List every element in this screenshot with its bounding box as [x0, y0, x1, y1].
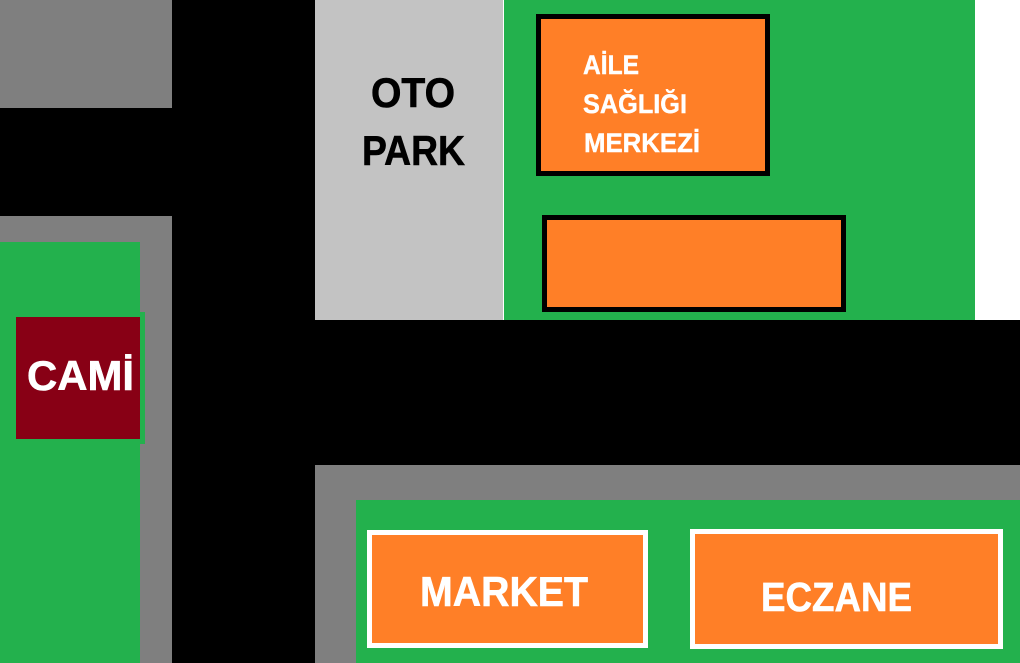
gray sidewalk left [0, 216, 172, 663]
panel: health centre grounds [504, 0, 975, 320]
unlabelled orange building [542, 215, 846, 312]
label: SAĞLIĞI: SAĞLIĞI [583, 89, 687, 119]
mosque building [16, 317, 140, 439]
pharmacy building [690, 529, 1003, 649]
panel: left mosque block [0, 216, 172, 663]
label: ECZANE: ECZANE [761, 574, 912, 620]
label: CAMİ: CAMİ [27, 352, 134, 399]
family health centre building [536, 14, 770, 176]
label: PARK: PARK [362, 127, 465, 174]
market building [367, 530, 648, 648]
panel: shops block [315, 465, 1020, 663]
label: MARKET: MARKET [420, 568, 588, 615]
empty white area top right [975, 0, 1020, 320]
green area left [0, 242, 140, 663]
green edge behind mosque [130, 312, 145, 444]
divider [503, 0, 504, 320]
panel: car park [315, 0, 503, 320]
label: MERKEZİ: MERKEZİ [584, 128, 700, 158]
gray sidewalk bottom [315, 465, 1020, 663]
green area bottom [356, 500, 1020, 663]
label: AİLE: AİLE [583, 50, 639, 80]
label: OTO: OTO [371, 69, 455, 116]
gray block top left [0, 0, 172, 108]
